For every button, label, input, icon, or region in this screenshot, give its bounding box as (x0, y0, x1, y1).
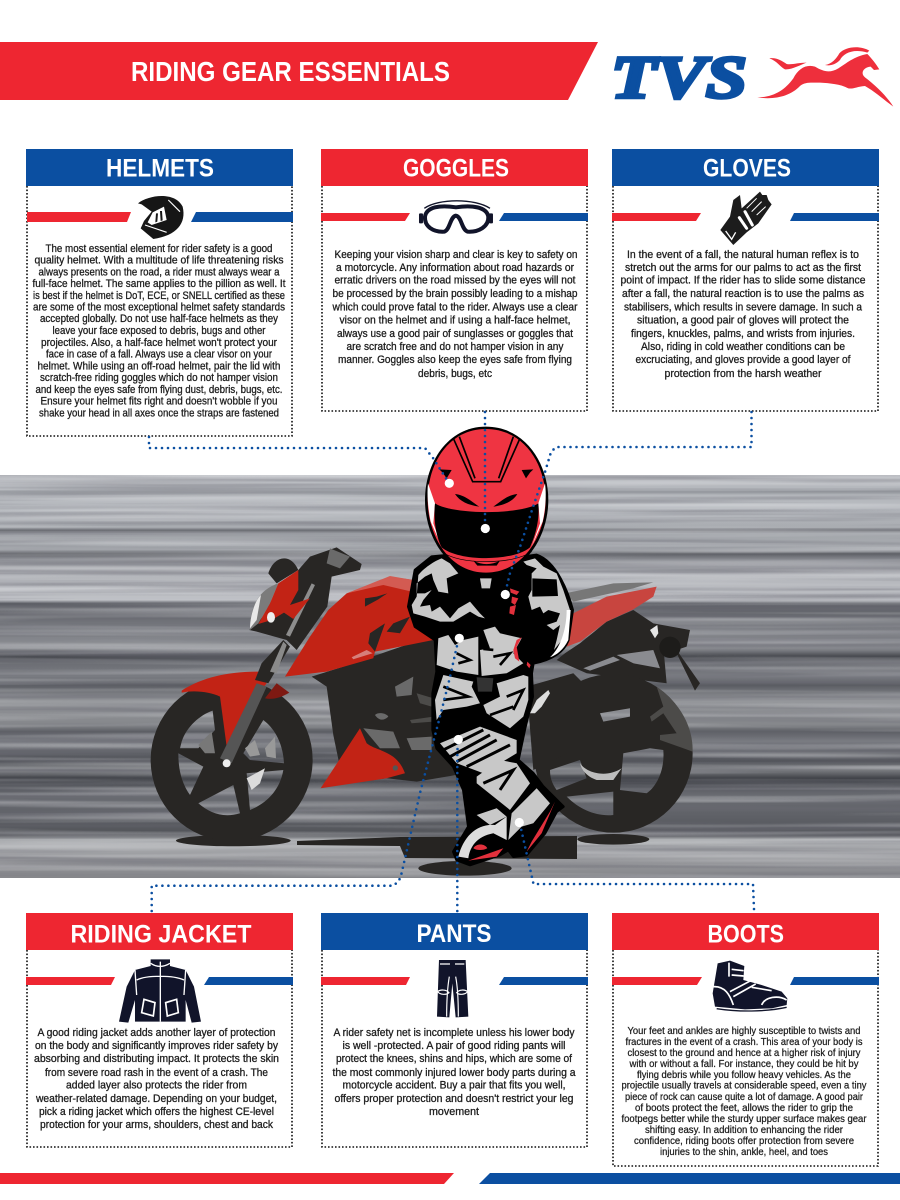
body text: always presents on the road, a rider must always wear a (38, 266, 280, 278)
body text: added layer also protects the rider from (66, 1080, 247, 1092)
front cowl (258, 570, 310, 624)
body text: protection for your arms, shoulders, chest and back (40, 1119, 274, 1131)
footer bars (0, 1173, 900, 1184)
stripes (26, 977, 293, 985)
body text: offers proper protection and doesn't restrict your leg (334, 1093, 574, 1105)
body text: on the body and significantly improves rider safety by (35, 1040, 279, 1052)
body text: Ensure your helmet fits right and doesn't wobble if you (40, 396, 278, 408)
body text: excruciating, and gloves provide a good layer of (636, 354, 851, 366)
icon: boot (713, 961, 787, 1011)
body text: from severe road rash in the event of a crash. The (45, 1067, 268, 1079)
connector: boots (520, 822, 754, 909)
body text: pick a riding jacket which offers the highest CE-level (39, 1106, 274, 1118)
body text: accepted globally. Do not use half-face helmets as they (40, 313, 278, 325)
body text: protect the knees, shins and hips, which are some of (336, 1053, 573, 1065)
body text: with or without a fall. For instance, they could be hit by (629, 1059, 858, 1070)
stripes (27, 212, 293, 222)
rear of bike (527, 582, 700, 845)
body text: manner. Goggles also keep the eyes safe from flying (338, 354, 572, 366)
body text: fingers, knuckles, palms, and wrists from injuries. (631, 328, 855, 340)
body text: be processed by the brain possibly leading to a mishap (332, 288, 578, 300)
body text: weather-related damage. Depending on your budget, (35, 1093, 277, 1105)
icon: glove (720, 192, 772, 245)
stripes (321, 977, 588, 985)
body text: debris, bugs, etc (418, 368, 493, 380)
boots (458, 788, 555, 861)
panel: gloves (612, 149, 879, 411)
body text: The most essential element for rider safety is a good (46, 243, 272, 255)
body text: point of impact. If the rider has to slide some distance (620, 274, 866, 286)
lower fairing (321, 728, 405, 788)
body text: of boots protect the feet, allows the rider to grip the (635, 1103, 853, 1114)
connector: goggles to visor (484, 412, 486, 528)
panel: helmets (26, 149, 293, 436)
body text: which could prove fatal to the rider. Always use a clear (332, 302, 578, 314)
body text: movement (429, 1106, 479, 1118)
illustration: rider (408, 427, 573, 876)
body text: is best if the helmet is DoT, ECE, or SNELL certified as these (33, 290, 285, 302)
body text: absorbing and distributing impact. It protects the skin (34, 1053, 279, 1065)
stripes (612, 977, 879, 985)
body text: stretch out the arms for our palms to act as the first (625, 262, 861, 274)
body text: is well -protected. A pair of good riding pants will (342, 1040, 566, 1052)
lower leg patches (440, 727, 530, 825)
illustration: motorcycle (151, 547, 700, 859)
connector: helmets to helmet (149, 437, 449, 483)
body text (332, 249, 578, 380)
panel: boots (612, 913, 879, 1166)
headlight (250, 583, 278, 630)
body text: stabilisers, which results in severe damage. In such a (624, 302, 863, 314)
body text: shake your head in all axes once the straps are fastened (39, 408, 279, 420)
body text: leave your face exposed to debris, bugs and other (52, 325, 266, 337)
heading: helmets: HELMETS (106, 154, 214, 182)
body text: after a fall, the natural reaction is to use the palms as (622, 288, 865, 300)
body text: quality helmet. With a multitude of life threatening risks (34, 254, 284, 266)
heading: goggles: GOGGLES (403, 154, 509, 182)
body text: A good riding jacket adds another layer of protection (38, 1027, 276, 1039)
body text: scratch-free riding goggles which do not hamper vision (40, 372, 278, 384)
body text: a motorcycle. Any information about road hazards or (336, 262, 574, 274)
engine block (312, 637, 467, 783)
body text: are some of the most exceptional helmet safety standards (33, 302, 285, 314)
body text: always use a good pair of sunglasses or goggles that (337, 328, 573, 340)
body text: Also, riding in cold weather conditions can be (641, 341, 845, 353)
body text: and keep the eyes safe from flying dust, debris, bugs, etc. (36, 384, 282, 396)
handlebar and mast (249, 547, 362, 650)
body text: projectile usually travels at considerable speed, even a tiny (622, 1081, 866, 1092)
body text (622, 1026, 867, 1158)
panel: pants (321, 913, 588, 1147)
body text: Your feet and ankles are highly susceptible to twists and (628, 1026, 860, 1037)
body text (32, 243, 286, 420)
icon: jacket (119, 959, 201, 1023)
body text: situation, a good pair of gloves will protect the (637, 314, 849, 326)
body text: Keeping your vision sharp and clear is key to safety on (334, 249, 578, 261)
front fender (182, 672, 267, 747)
body text: fractures in the event of a crash. This area of your body is (626, 1037, 862, 1048)
connector: gloves to hand (505, 412, 752, 594)
body text: flying debris while you follow heavy vehicles. As the (637, 1070, 851, 1081)
connector: pants (456, 740, 459, 911)
fuel tank (285, 577, 467, 677)
body text: closest to the ground and hence at a higher risk of injury (628, 1048, 860, 1059)
body text: visor on the helmet and if using a half-face helmet, (340, 314, 570, 326)
body text: piece of rock can cause quite a lot of damage. A good pair (625, 1092, 864, 1103)
body text: protection from the harsh weather (664, 368, 822, 380)
body text: the most commonly injured lower body parts during a (332, 1067, 576, 1079)
upper body patches (412, 558, 571, 728)
ground shadow (297, 836, 577, 859)
body text: shifting easy. In addition to enhancing the rider (645, 1125, 844, 1136)
heading: boots: BOOTS (708, 920, 784, 948)
body text: motorcycle accident. Buy a pair that fits you well, (342, 1080, 566, 1092)
body text: projectiles. Also, a half-face helmet won't protect your (41, 337, 277, 349)
body text (332, 1027, 576, 1118)
icon: goggles (419, 201, 493, 232)
header banner (0, 42, 598, 100)
body text: A rider safety net is incomplete unless his lower body (334, 1027, 575, 1039)
stripes (612, 213, 879, 221)
body text: footpegs better while the sturdy upper surface makes gear (622, 1114, 867, 1125)
stripes (321, 213, 588, 221)
connector: riding jacket (152, 638, 459, 911)
heading: riding jacket: RIDING JACKET (70, 920, 252, 948)
heading: pants: PANTS (416, 920, 492, 948)
boot shadow (418, 861, 512, 876)
fork (220, 683, 267, 763)
logo: TVS with horse: TVS (611, 44, 747, 110)
body text: helmet. While using an off-road helmet, pair the lid with (38, 360, 280, 372)
body text: In the event of a fall, the natural human reflex is to (627, 249, 859, 261)
front of bike (151, 547, 467, 846)
body text: face in case of a fall. Always use a clear visor on your (46, 348, 272, 360)
background: motion-blur road photo (0, 475, 900, 878)
body text: confidence, riding boots offer protection from severe (634, 1136, 854, 1147)
icon: helmet (138, 196, 184, 239)
body text: erratic drivers on the road missed by the eyes will not (334, 274, 576, 286)
markers: white dots (445, 479, 524, 827)
title: RIDING GEAR ESSENTIALS (131, 56, 450, 87)
helmet (425, 427, 548, 575)
body text: are scratch free and do not hamper vision in any (346, 341, 564, 353)
windscreen (268, 558, 298, 583)
panel: riding jacket (26, 913, 293, 1147)
heading: gloves: GLOVES (703, 154, 791, 182)
logo: TVS with horse (611, 44, 893, 110)
body text (620, 249, 866, 380)
body text: injuries to the shin, ankle, heel, and toes (660, 1147, 828, 1158)
suit (408, 555, 573, 865)
panel: goggles (321, 149, 588, 411)
body text (34, 1027, 279, 1131)
body text: full-face helmet. The same applies to the pillion as well. It (32, 278, 286, 290)
icon: pants (437, 960, 468, 1017)
